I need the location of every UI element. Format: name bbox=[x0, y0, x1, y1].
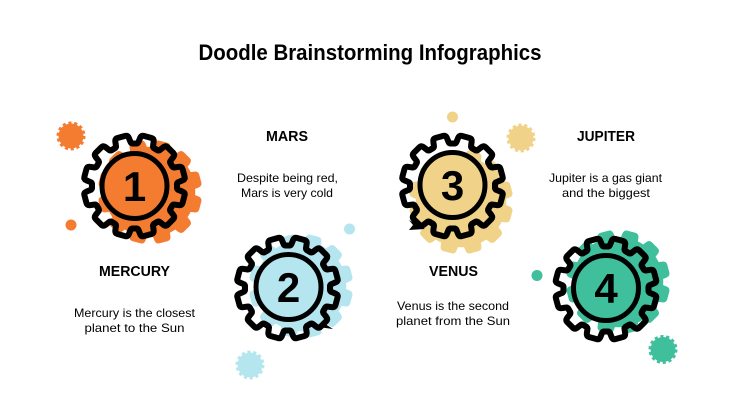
icon: gear outline 2 bbox=[235, 236, 340, 340]
icon: orange gear fill bbox=[98, 140, 202, 244]
icon: small orange cog bbox=[58, 124, 84, 148]
text block: Jupiter bbox=[549, 129, 663, 200]
icon: blue dot bbox=[344, 224, 355, 234]
heading: Venus: VENUS bbox=[429, 264, 478, 280]
body: Jupiter line 1: Jupiter is a gas giant bbox=[549, 171, 663, 185]
body: Mars line 1: Despite being red, bbox=[237, 171, 338, 185]
heading: Mercury: MERCURY bbox=[99, 264, 170, 280]
icon: blue gear fill bbox=[249, 234, 353, 338]
text block: Venus bbox=[396, 264, 510, 328]
number 4: 4 bbox=[594, 265, 618, 312]
body: Mars line 2: Mars is very cold bbox=[241, 186, 333, 200]
icon: gear outline 4 bbox=[554, 237, 658, 341]
heading: Mars: MARS bbox=[266, 129, 308, 145]
icon: number disc 1 bbox=[102, 154, 167, 218]
icon: gear 2 pen flick bbox=[318, 322, 333, 329]
icon: small green cog bbox=[650, 337, 676, 362]
body: Jupiter line 2: and the biggest bbox=[562, 186, 651, 200]
panel: gear 3 bbox=[400, 112, 534, 254]
body: Venus line 2: planet from the Sun bbox=[396, 314, 510, 328]
panel: gear 1 bbox=[58, 124, 202, 244]
number 3: 3 bbox=[441, 162, 464, 209]
heading: Jupiter: JUPITER bbox=[577, 129, 635, 145]
icon: gear 3 pen flick bbox=[409, 220, 425, 230]
icon: gear outline 1 bbox=[82, 134, 187, 238]
text block: Mars bbox=[237, 129, 338, 200]
icon: green gear fill bbox=[566, 230, 670, 334]
icon: number disc 3 bbox=[420, 152, 485, 218]
body: Venus line 1: Venus is the second bbox=[397, 299, 509, 313]
title: Doodle Brainstorming Infographics bbox=[198, 40, 542, 65]
text block: Mercury bbox=[74, 264, 196, 335]
number 2: 2 bbox=[277, 264, 300, 311]
icon: small blue cog bbox=[238, 352, 262, 378]
icon: small yellow cog bbox=[508, 126, 534, 150]
body: Mercury line 2: planet to the Sun bbox=[84, 321, 184, 335]
icon: green dot bbox=[532, 270, 542, 281]
icon: yellow gear fill bbox=[409, 150, 513, 254]
icon: number disc 4 bbox=[574, 256, 638, 320]
icon: orange dot bbox=[66, 220, 76, 230]
body: Mercury line 1: Mercury is the closest bbox=[74, 306, 196, 320]
number 1: 1 bbox=[123, 163, 146, 210]
icon: gear outline 3 bbox=[400, 134, 505, 238]
panel: gear 4 bbox=[532, 230, 676, 362]
panel: gear 2 bbox=[235, 224, 355, 378]
icon: number disc 2 bbox=[256, 254, 321, 320]
icon: yellow dot bbox=[447, 112, 458, 122]
